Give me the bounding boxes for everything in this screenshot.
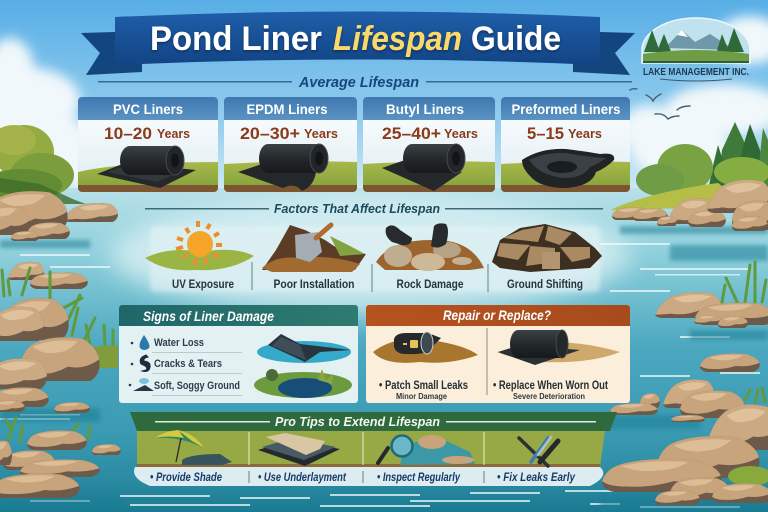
panel: EPDM liners: 20–30+	[240, 124, 300, 143]
icon: ground shifting	[492, 224, 602, 291]
grass: right reeds	[722, 262, 766, 402]
item: soft soggy ground: Soft, Soggy Ground	[154, 380, 240, 392]
panel: preformed liners: Years	[568, 126, 602, 141]
icon: soggy pond	[254, 369, 352, 398]
panel: factors that affect lifespan	[145, 221, 602, 292]
text: patch small leaks: • Patch Small Leaks	[379, 380, 468, 392]
icon: preformed pond shell	[522, 149, 614, 188]
icon: patch small leak	[373, 332, 478, 363]
water pale glow	[110, 195, 630, 315]
title banner	[81, 12, 635, 75]
left tree	[0, 125, 86, 204]
text: replace when worn out	[493, 380, 608, 401]
title text	[150, 20, 561, 58]
panel: signs of liner damage: Signs of Liner Damage	[143, 308, 274, 324]
panel: PVC liners: Years	[157, 126, 190, 141]
heading: factors: Factors That Affect Lifespan	[274, 201, 440, 216]
heading: pro tips: Pro Tips to Extend Lifespan	[275, 415, 440, 429]
rocks: right shore	[602, 180, 768, 505]
icon: underlayment layers	[258, 433, 340, 466]
panel: preformed liners: 5–15	[527, 124, 564, 143]
item: water loss	[131, 335, 204, 350]
icon: inspect magnifier	[378, 435, 475, 465]
background: clouds	[0, 16, 768, 187]
birds	[630, 89, 690, 119]
item: water loss: Water Loss	[154, 337, 204, 349]
icon: shade umbrella	[154, 430, 232, 465]
icon: rolled liner	[382, 144, 465, 191]
text: replace when worn out: Severe Deterioration	[513, 392, 585, 401]
item: soft soggy ground	[129, 378, 240, 392]
panel: EPDM liners	[224, 97, 357, 192]
panel: preformed liners	[501, 97, 630, 192]
icon: UV sun	[145, 221, 254, 291]
icon: torn liner in water	[257, 334, 351, 363]
panel: repair or replace	[366, 305, 630, 403]
item: cracks and tears	[131, 355, 222, 372]
panel: butyl liners: Butyl Liners	[386, 101, 464, 117]
panel: butyl liners	[363, 97, 495, 192]
background: sky	[0, 0, 768, 200]
panel: repair or replace: Repair or Replace?	[443, 307, 551, 323]
item: cracks and tears: Cracks & Tears	[154, 358, 222, 370]
panel: butyl liners: Years	[444, 126, 478, 141]
rocks: left shore	[0, 191, 121, 498]
label: Poor Installation	[274, 277, 354, 291]
grass: left reeds	[2, 268, 113, 442]
panel: PVC liners: PVC Liners	[113, 101, 183, 117]
tip labels: • Use Underlayment	[258, 472, 347, 484]
heading: average lifespan: Average Lifespan	[298, 74, 419, 91]
title text: Lifespan	[333, 20, 462, 58]
background: water	[0, 188, 768, 512]
panel: butyl liners: 25–40+	[382, 124, 441, 143]
icon: crossed tools	[519, 437, 558, 466]
logo text: LAKE MANAGEMENT INC.	[643, 67, 749, 78]
water highlights	[0, 243, 760, 508]
text: patch small leaks: Minor Damage	[396, 392, 448, 401]
label: Rock Damage	[396, 277, 464, 291]
icon: rock damage	[376, 223, 484, 291]
icon: poor installation shovel	[262, 225, 366, 291]
title text: Guide	[471, 20, 561, 58]
text: patch small leaks	[379, 380, 468, 401]
water dark reflections	[0, 226, 768, 512]
logo: Lake Management Inc.	[642, 18, 750, 81]
panel: PVC liners: 10–20	[104, 124, 152, 143]
panel: EPDM liners: EPDM Liners	[246, 101, 328, 117]
tip labels	[150, 472, 576, 484]
label: UV Exposure	[172, 277, 234, 291]
text: replace when worn out: • Replace When Worn Out	[493, 380, 608, 392]
panel: pro tips	[130, 412, 617, 486]
panel: EPDM liners: Years	[304, 126, 338, 141]
panel: signs of liner damage	[119, 305, 358, 403]
label: Ground Shifting	[507, 277, 583, 291]
icon: rolled liner	[238, 144, 328, 191]
icon: rolled liner	[97, 146, 196, 188]
right trees	[610, 122, 768, 210]
tip labels: • Provide Shade	[150, 472, 222, 484]
title text: Pond Liner	[150, 20, 322, 58]
icon: replacement roll	[497, 330, 620, 365]
panel: preformed liners: Preformed Liners	[512, 101, 621, 117]
panel: PVC liners	[78, 97, 218, 192]
tip labels: • Fix Leaks Early	[497, 472, 576, 484]
tip labels: • Inspect Regularly	[377, 472, 460, 484]
